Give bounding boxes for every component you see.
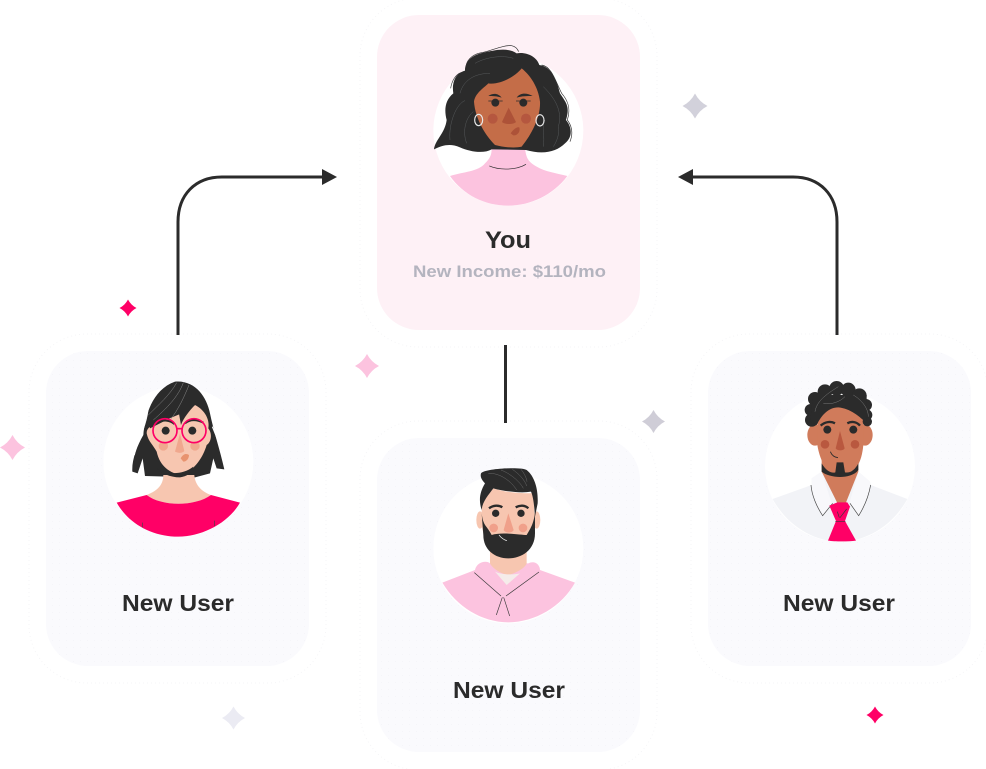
label: new user center: New User xyxy=(453,677,565,703)
sparkles xyxy=(0,94,884,730)
heading: You: You xyxy=(485,227,531,254)
text: new income: New Income: $110/mo xyxy=(413,262,606,281)
label: new user left: New User xyxy=(122,590,234,616)
panel: center new user xyxy=(360,421,657,769)
arrow: left user to you xyxy=(178,169,337,335)
avatar: woman with curly hair xyxy=(433,46,583,206)
connector: center user to you xyxy=(504,345,507,423)
arrow: right user to you xyxy=(678,169,837,335)
panel: left new user xyxy=(29,334,326,683)
label: new user right: New User xyxy=(783,590,895,616)
panel: You xyxy=(360,0,657,347)
avatar: bearded man xyxy=(433,468,583,623)
avatar: woman with glasses xyxy=(103,382,253,537)
avatar: man with tie xyxy=(765,381,915,542)
panel: right new user xyxy=(691,334,986,683)
